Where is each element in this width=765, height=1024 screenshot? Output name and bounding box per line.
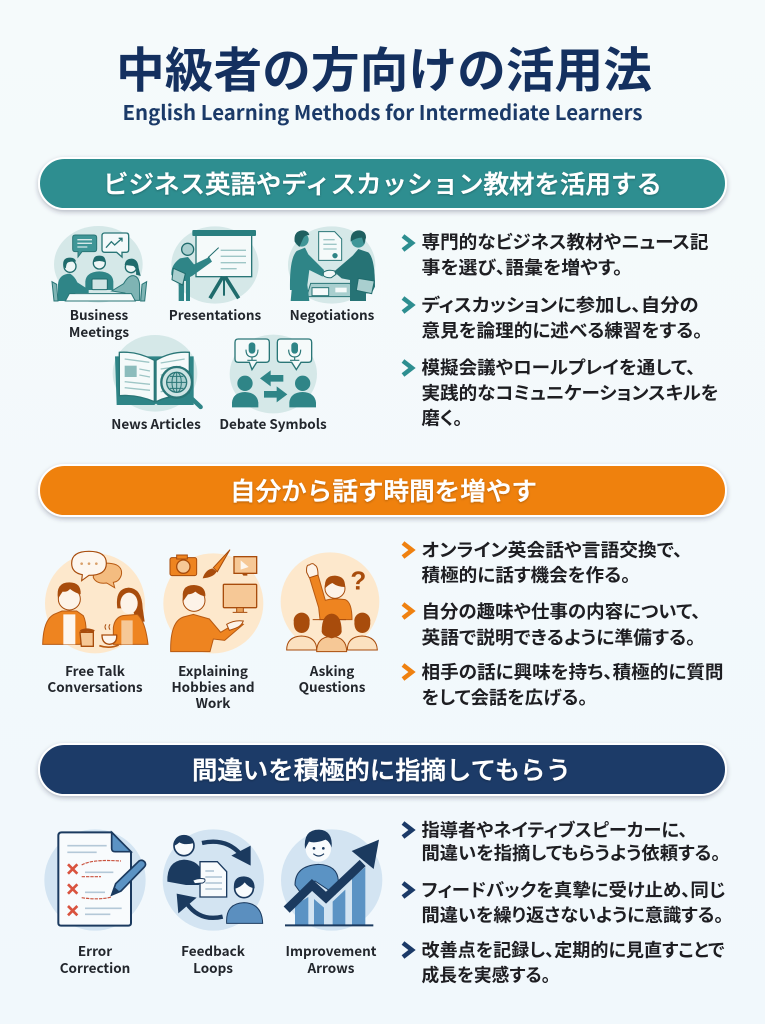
- bullets: section 1 text: 事を選び、語彙を増やす。: [422, 254, 622, 280]
- labels: section 3 captions: Improvement: [286, 940, 377, 960]
- labels: section 2 captions: Conversations: [47, 676, 143, 696]
- bullets: section 1 text: 磨く。: [422, 404, 462, 430]
- labels: section 3 captions: [60, 940, 377, 977]
- bullets: section 3 text: 間違いを繰り返さないように意識する。: [422, 902, 724, 928]
- banner: section 2 heading: [39, 465, 726, 516]
- bullets: section 2 text: 相手の話に興味を持ち、積極的に質問: [422, 658, 724, 684]
- icon: business meetings: [52, 226, 147, 303]
- bullets: section 3 text: 成長を実感する。: [422, 962, 550, 988]
- bullets: section 3 text: 指導者やネイティブスピーカーに、: [422, 816, 688, 842]
- icon: feedback loops: [163, 829, 264, 931]
- bullets: section 3 text: フィードバックを真摯に受け止め、同じ: [422, 876, 726, 902]
- icon: error correction: [44, 829, 146, 931]
- icon: explaining hobbies and work: [163, 550, 263, 653]
- labels: section 2 captions: Hobbies and: [171, 676, 255, 696]
- labels: section 1 captions: Debate Symbols: [219, 413, 327, 433]
- bullets: section 1 text: 模擬会議やロールプレイを通して、: [422, 354, 696, 380]
- panel: get mistakes corrected: [39, 744, 726, 988]
- icon group: section 3 illustrations: [44, 829, 382, 931]
- labels: section 1 captions: Meetings: [69, 321, 129, 341]
- labels: section 2 captions: Work: [196, 692, 231, 712]
- labels: section 3 captions: Loops: [193, 957, 233, 977]
- banner: section 1 heading: [39, 158, 726, 209]
- bullets: section 1 text: ディスカッションに参加し、自分の: [422, 292, 698, 318]
- icon: news articles: [113, 335, 201, 412]
- bullets: section 2 text: [403, 536, 724, 710]
- bullets: section 3 text: 間違いを指摘してもらうよう依頼する。: [422, 840, 720, 866]
- icon: asking questions: ?: [350, 566, 366, 596]
- icon: free talk conversations: [43, 551, 148, 653]
- icon group: section 1 illustrations: [52, 226, 375, 413]
- banner: section 3 heading: 間違いを積極的に指摘してもらう: [192, 751, 571, 787]
- panel: business discussion materials: [39, 158, 726, 433]
- labels: section 1 captions: Negotiations: [290, 304, 375, 324]
- bullets: section 1 text: 意見を論理的に述べる練習をする。: [422, 317, 702, 343]
- icon group: section 2 illustrations: [43, 550, 379, 653]
- labels: section 3 captions: Feedback: [181, 940, 246, 960]
- labels: section 2 captions: Asking: [309, 660, 354, 680]
- bullets: section 1 text: 実践的なコミュニケーションスキルを: [422, 380, 718, 406]
- icon: presentations: [171, 226, 259, 304]
- labels: section 3 captions: Error: [78, 940, 112, 960]
- labels: section 3 captions: Correction: [60, 957, 130, 977]
- labels: section 3 captions: Arrows: [307, 957, 355, 977]
- panel: increase speaking time: [39, 465, 726, 712]
- bullets: section 1 text: 専門的なビジネス教材やニュース記: [422, 228, 708, 254]
- bullets: section 3 text: [403, 816, 726, 988]
- icon: improvement arrows: [281, 829, 382, 931]
- bullets: section 1 text: [403, 228, 718, 430]
- subtitle: English Learning Methods for Intermediate Learners: [122, 96, 642, 126]
- labels: section 2 captions: Explaining: [178, 660, 248, 680]
- icon: debate symbols: [230, 335, 317, 413]
- bullets: section 2 text: 自分の趣味や仕事の内容について、: [422, 598, 700, 624]
- bullets: section 2 text: オンライン英会話や言語交換で、: [422, 536, 682, 562]
- banner: section 2 heading: 自分から話す時間を増やす: [230, 472, 537, 508]
- icon: negotiations: [288, 226, 375, 304]
- bullets: section 3 text: 改善点を記録し、定期的に見直すことで: [422, 936, 724, 962]
- labels: section 2 captions: Questions: [299, 676, 366, 696]
- bullets: section 2 text: 積極的に話す機会を作る。: [422, 562, 630, 588]
- labels: section 1 captions: Business: [70, 304, 129, 324]
- bullets: section 2 text: 英語で説明できるように準備する。: [422, 624, 696, 650]
- labels: section 2 captions: [47, 660, 366, 712]
- banner: section 3 heading: [39, 744, 726, 795]
- labels: section 1 captions: [69, 304, 375, 433]
- icon: asking questions: [281, 552, 379, 652]
- labels: section 2 captions: Free Talk: [65, 660, 126, 680]
- banner: section 1 heading: ビジネス英語やディスカッション教材を活用する: [103, 165, 662, 201]
- labels: section 1 captions: News Articles: [111, 413, 201, 433]
- title: 中級者の方向けの活用法: [116, 31, 652, 101]
- labels: section 1 captions: Presentations: [169, 304, 262, 324]
- bullets: section 2 text: をして会話を広げる。: [422, 684, 588, 710]
